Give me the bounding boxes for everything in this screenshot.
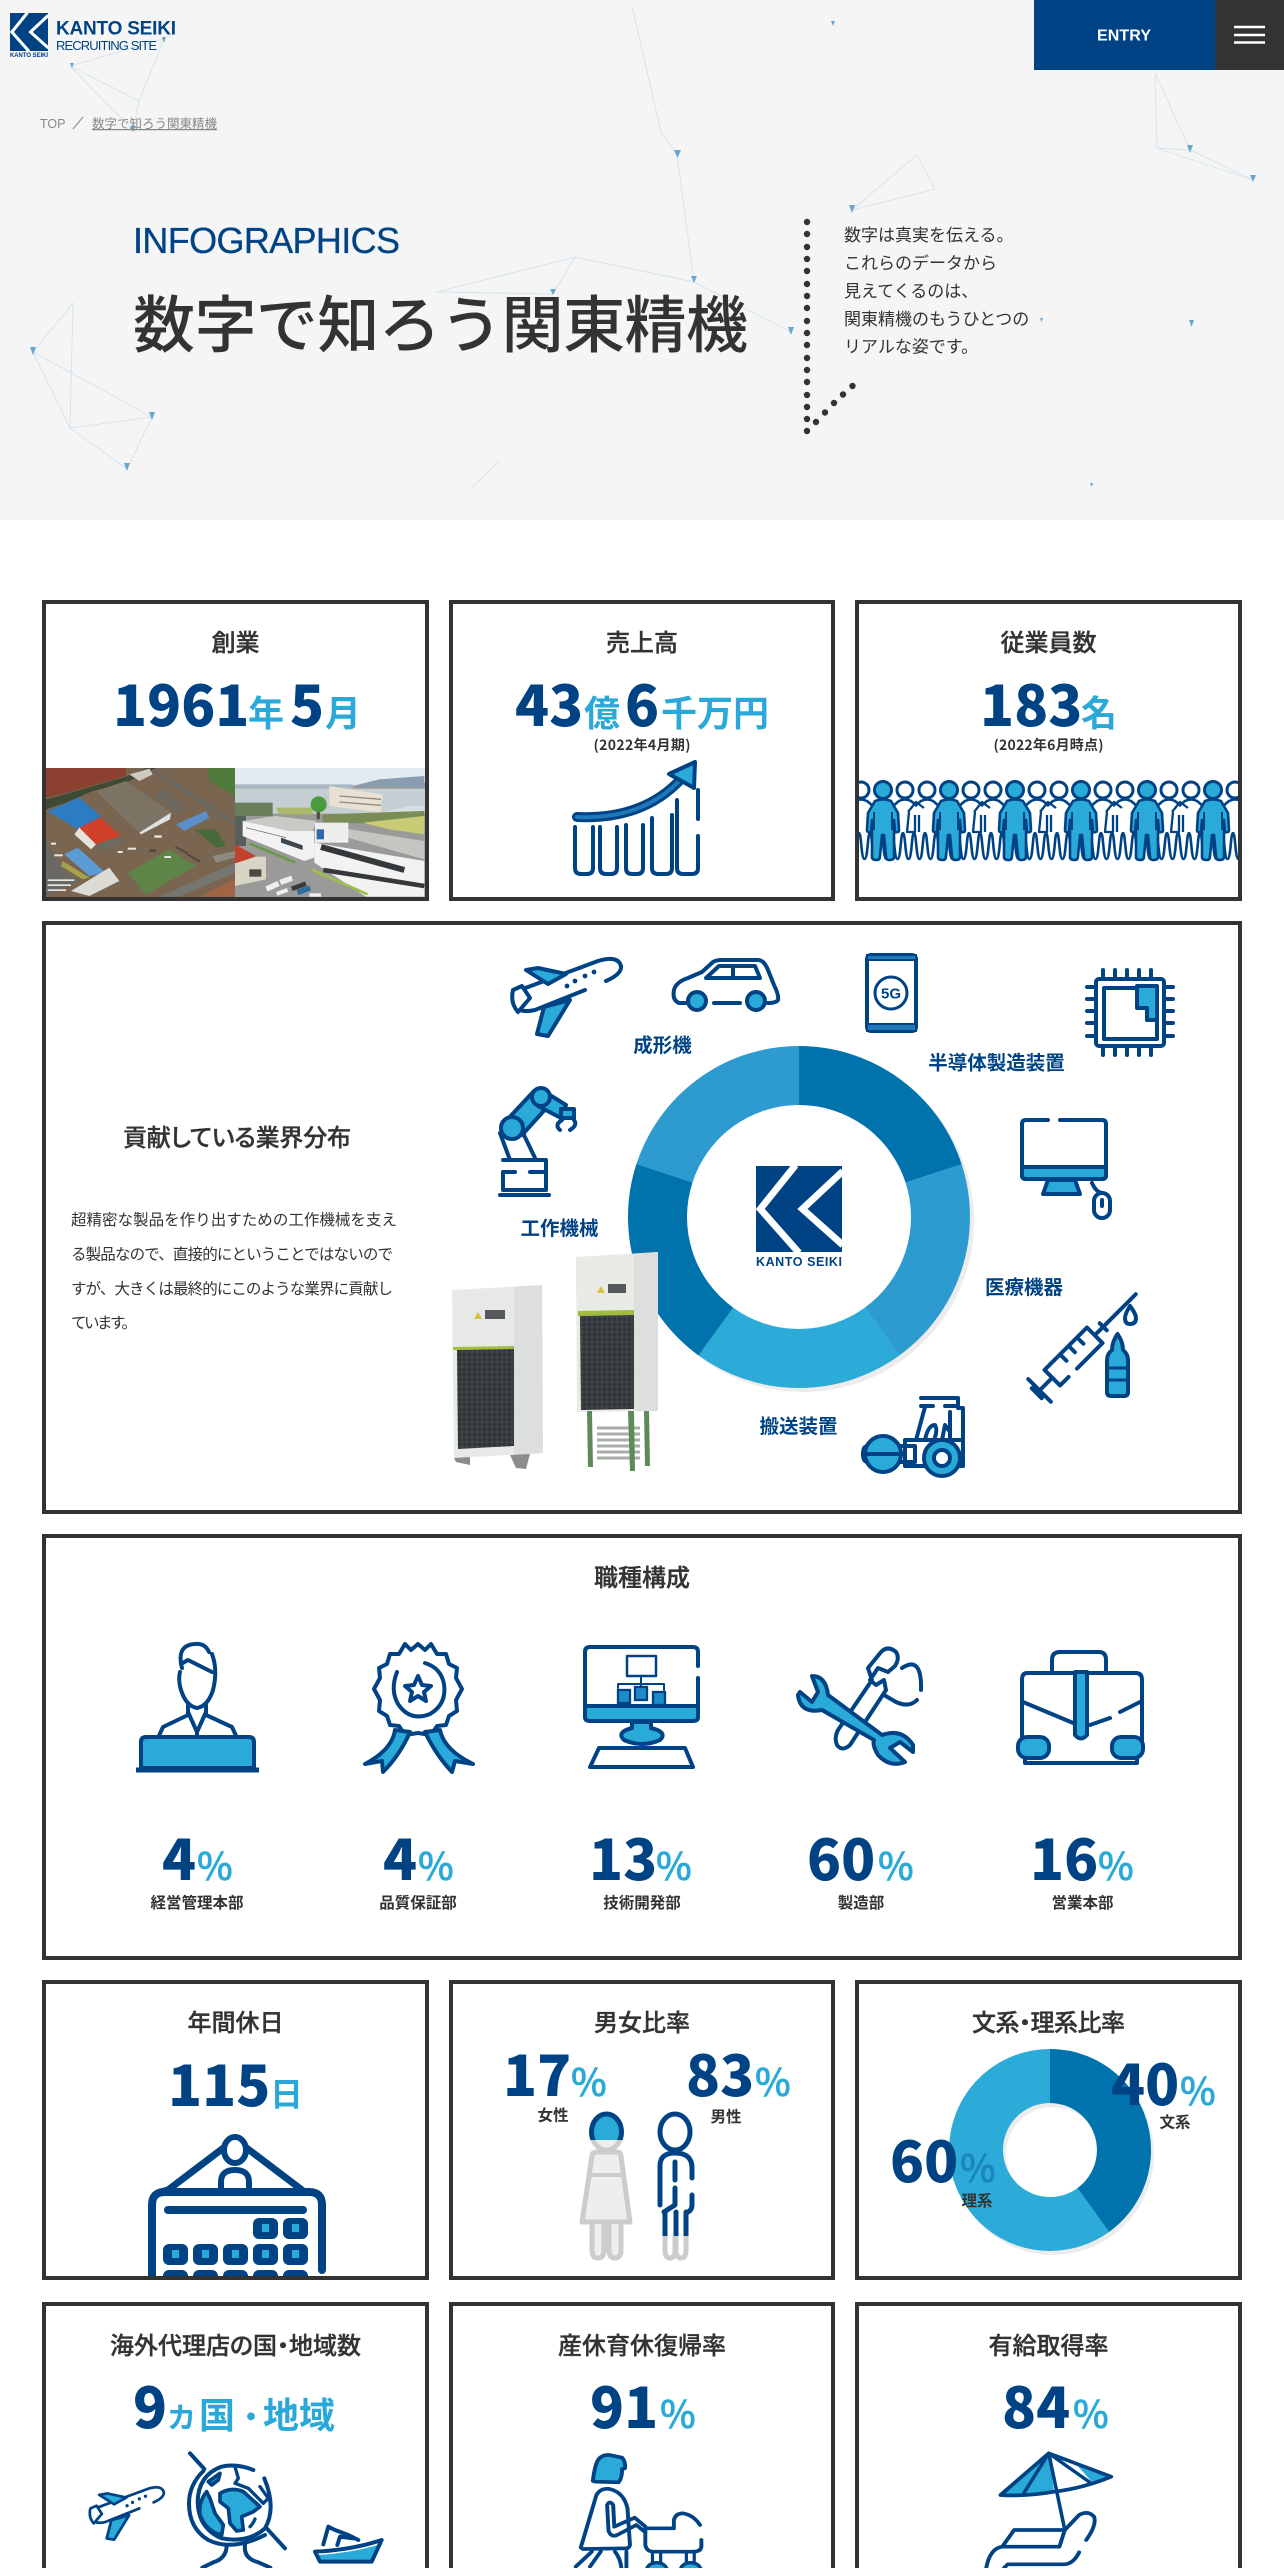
- panel: sales: [451, 602, 833, 899]
- photo: factory aerial view: [46, 766, 426, 899]
- panel: gender ratio: [451, 1982, 833, 2278]
- figure: founding date: 5: [290, 662, 324, 743]
- stat: female: %: [571, 2052, 607, 2107]
- stat: 営業本部: 営業本部: [1051, 1891, 1114, 1913]
- figure: paid leave rate: %: [1073, 2384, 1109, 2439]
- stat: 営業本部: 16: [1030, 1816, 1098, 1897]
- center logo: [756, 1165, 843, 1269]
- hero paragraph: 見えてくるのは、: [844, 277, 978, 302]
- text block: description: ています。: [71, 1311, 137, 1333]
- panel: founding: [44, 602, 427, 899]
- stat: humanities: 40: [1111, 2041, 1179, 2122]
- heading: leave return rate: 産休育休復帰率: [558, 2326, 726, 2361]
- icon: 5G smartphone: 5G: [881, 986, 901, 1002]
- label: 成形機: 成形機: [633, 1029, 692, 1058]
- panel: employees: [849, 602, 1247, 899]
- stat: 経営管理本部: [150, 1816, 244, 1913]
- icon: beach umbrella and lounger: [986, 2453, 1111, 2568]
- stat: female: 17: [503, 2032, 571, 2113]
- photo: cooling unit right: [576, 1252, 658, 1471]
- stat: 経営管理本部: 4: [162, 1816, 196, 1897]
- hero eyebrow: INFOGRAPHICS: [133, 220, 400, 261]
- figure: holidays: 115: [168, 2042, 270, 2123]
- icon: ship: [315, 2527, 382, 2562]
- figure: employee count: 183: [980, 662, 1082, 743]
- stat: 技術開発部: %: [656, 1836, 692, 1891]
- stat: 技術開発部: 技術開発部: [603, 1891, 681, 1913]
- icon: quality badge: [365, 1644, 473, 1772]
- heading: gender ratio: 男女比率: [594, 2003, 690, 2038]
- center logo: KANTO SEIKI: [756, 1255, 842, 1269]
- figure: countries and regions: ・: [236, 2393, 266, 2437]
- stat: 技術開発部: [589, 1816, 692, 1913]
- figure: return rate: %: [660, 2384, 696, 2439]
- stat: 品質保証部: %: [418, 1836, 454, 1891]
- icon: plane: [90, 2487, 164, 2540]
- figure: sales amount: 43: [515, 662, 583, 743]
- figure: countries and regions: 地域: [263, 2387, 335, 2439]
- figure: founding date: 年: [248, 685, 284, 737]
- icon: calendar: [152, 2137, 322, 2291]
- icon: woman: [582, 2114, 630, 2258]
- stat: male: %: [755, 2052, 791, 2107]
- icon: man: [660, 2114, 692, 2258]
- hero paragraph: これらのデータから: [844, 249, 997, 274]
- figure: founding date: 月: [325, 685, 361, 737]
- heading: paid leave rate: 有給取得率: [988, 2326, 1108, 2361]
- icon: semiconductor chip: [1087, 970, 1173, 1055]
- figure: founding date: 1961: [113, 662, 249, 743]
- header logo: [10, 13, 176, 59]
- text block: description: 超精密な製品を作り出すための工作機械を支え: [71, 1208, 397, 1230]
- heading: overseas agents: 海外代理店の国・地域数: [110, 2326, 361, 2361]
- donut chart: industries: [601, 1019, 997, 1415]
- text block: description: [71, 1208, 397, 1333]
- stat: science: 理系: [961, 2189, 993, 2211]
- stat: 品質保証部: [379, 1816, 457, 1913]
- entry button: ENTRY: [1097, 28, 1151, 44]
- stat: 製造部: 製造部: [838, 1891, 885, 1913]
- heading: founding: 創業: [212, 623, 260, 658]
- panel: job composition: [44, 1536, 1240, 1958]
- figure: sales amount: 億: [584, 685, 620, 737]
- hero paragraph: リアルな姿です。: [844, 332, 978, 358]
- heading: job composition: 職種構成: [594, 1558, 690, 1593]
- hero paragraph: 関東精機のもうひとつの: [844, 305, 1029, 330]
- stat: humanities: [1111, 2041, 1216, 2132]
- stat: 製造部: 60: [807, 1816, 875, 1897]
- stat: 品質保証部: 品質保証部: [379, 1891, 457, 1913]
- stat: male: 男性: [710, 2105, 742, 2127]
- stat: 経営管理本部: 経営管理本部: [150, 1891, 244, 1913]
- figure: sales amount: 千万円: [661, 685, 769, 737]
- icon: parent with stroller: [576, 2455, 701, 2568]
- note: as-of date: (2022年6月時点): [994, 735, 1104, 755]
- label: 半導体製造装置: 半導体製造装置: [928, 1046, 1065, 1076]
- stat: female: [503, 2032, 607, 2126]
- hero background: [0, 0, 1284, 520]
- decorative network lines: [30, 6, 1256, 488]
- stat: female: 女性: [537, 2104, 569, 2126]
- text block: description: すが、大きくは最終的にこのような業界に貢献し: [71, 1277, 393, 1299]
- icon: briefcase: [1018, 1652, 1143, 1763]
- heading: employees: 従業員数: [1000, 623, 1096, 658]
- heading: industry distribution: 貢献している業界分布: [123, 1118, 351, 1153]
- figure: return rate: 91: [590, 2364, 658, 2445]
- icon: globe: [189, 2453, 285, 2568]
- header logo: KANTO SEIKI: [10, 53, 48, 59]
- heading: annual holidays: 年間休日: [188, 2003, 284, 2038]
- stat: 品質保証部: 4: [383, 1816, 417, 1897]
- icon: monitor with org chart: [585, 1647, 698, 1767]
- panel: leave return rate: [451, 2304, 833, 2568]
- icon: syringe and vial: [1025, 1283, 1147, 1405]
- figure: employee count: 名: [1081, 685, 1117, 737]
- dotted line: [804, 219, 856, 434]
- panel: paid leave rate: [857, 2304, 1240, 2568]
- menu button: [1215, 0, 1284, 70]
- stat: science: 60: [890, 2118, 958, 2199]
- heading: humanities vs science ratio: 文系・理系比率: [972, 2003, 1125, 2038]
- hero paragraph: 数字は真実を伝える。: [844, 221, 1014, 246]
- stat: 製造部: [807, 1816, 914, 1913]
- label: 医療機器: 医療機器: [985, 1271, 1063, 1300]
- icon: manager: [136, 1644, 259, 1770]
- stat: science: %: [960, 2138, 996, 2193]
- icon: row of people: [849, 782, 1247, 862]
- stat: science: [890, 2118, 996, 2211]
- breadcrumb: TOP: [40, 117, 65, 131]
- figure: countries and regions: 国: [199, 2387, 235, 2439]
- donut chart: humanities 40 science 60: [976, 2076, 1127, 2228]
- figure: holidays: 日: [270, 2068, 303, 2116]
- stat: male: [686, 2032, 791, 2127]
- text block: description: る製品なので、直接的にということではないので: [71, 1242, 393, 1264]
- stat: male: 83: [686, 2032, 754, 2113]
- panel: industry distribution: [44, 923, 1240, 1512]
- figure: sales amount: 6: [625, 662, 659, 743]
- label: 工作機械: 工作機械: [520, 1212, 599, 1241]
- panel: annual holidays: [44, 1982, 427, 2291]
- panel: overseas agents: [44, 2304, 427, 2568]
- figure: countries and regions: カ: [167, 2395, 196, 2437]
- icon: robot arm: [500, 1088, 575, 1195]
- heading: sales: 売上高: [606, 623, 678, 658]
- label: 搬送装置: 搬送装置: [759, 1410, 838, 1439]
- stat: 製造部: %: [878, 1836, 914, 1891]
- entry button: [1034, 0, 1215, 70]
- icon: 5G smartphone: [867, 955, 916, 1031]
- breadcrumb: 数字で知ろう関東精機: [92, 113, 218, 132]
- stat: humanities: 文系: [1159, 2110, 1191, 2132]
- figure: countries and regions: 9: [133, 2364, 167, 2445]
- icon: car: [674, 960, 778, 1010]
- icon: wrench and screwdriver: [798, 1648, 921, 1764]
- icon: rising bar chart: [575, 762, 698, 874]
- icon: desktop monitor: [1022, 1120, 1110, 1218]
- icon: airplane: [512, 959, 621, 1036]
- figure: paid leave rate: 84: [1002, 2364, 1070, 2445]
- header logo: RECRUITING SITE: [56, 38, 157, 53]
- icon: road roller: [863, 1398, 963, 1476]
- stat: 技術開発部: 13: [589, 1816, 657, 1897]
- hero paragraph: [844, 221, 1029, 358]
- note: fiscal period: (2022年4月期): [594, 735, 690, 755]
- hero title: 数字で知ろう関東精機: [133, 275, 748, 365]
- stat: 営業本部: %: [1098, 1836, 1134, 1891]
- photo: cooling unit left: [452, 1285, 543, 1469]
- stat: 経営管理本部: %: [197, 1836, 233, 1891]
- panel: humanities vs science ratio: [857, 1982, 1240, 2278]
- stat: 営業本部: [1030, 1816, 1134, 1913]
- header logo: KANTO SEIKI: [56, 18, 176, 40]
- stat: humanities: %: [1180, 2061, 1216, 2116]
